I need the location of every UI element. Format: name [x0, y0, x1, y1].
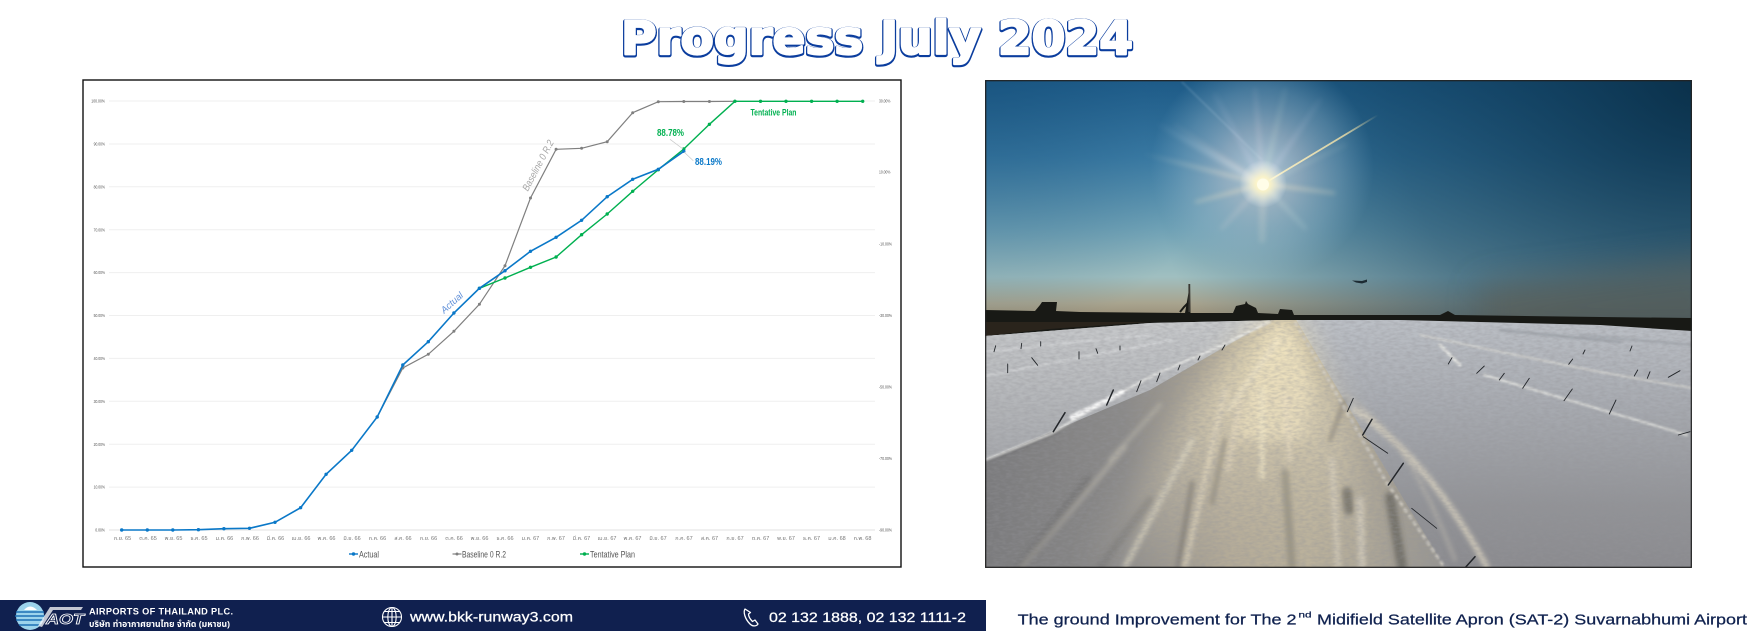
x axis month labels: ม.ค. 66	[216, 536, 233, 542]
x axis month labels: เม.ย. 67	[598, 536, 616, 542]
left axis labels: 20.00%	[94, 442, 105, 447]
x axis month labels: ธ.ค. 67	[803, 536, 820, 542]
right seam folds	[1295, 322, 1445, 568]
left axis labels: 60.00%	[94, 270, 105, 275]
x axis month labels: พ.ย. 66	[471, 536, 488, 542]
right axis labels: -70.00%	[879, 456, 892, 461]
x axis month labels: มิ.ย. 66	[343, 536, 361, 542]
value label 88.19%: 88.19%	[695, 157, 722, 168]
caption: The ground Improvement for The 2	[1018, 612, 1297, 628]
x axis month labels: ก.ค. 66	[369, 536, 386, 542]
caption: Midifield Satellite Apron (SAT-2) Suvarnabhumi Airport	[1317, 612, 1748, 628]
legend: Baseline 0 R.2	[462, 550, 506, 560]
caption	[1018, 610, 1748, 628]
x axis month labels: พ.ค. 66	[318, 536, 335, 542]
stakes	[994, 342, 1690, 567]
icon: AOT logo: AOT	[45, 611, 86, 628]
x axis month labels: ก.ค. 67	[675, 536, 693, 542]
photo: ground improvement site under the sun	[985, 80, 1692, 568]
series annotation: Actual: Actual	[438, 290, 466, 317]
left axis labels: 100.00%	[91, 99, 105, 104]
fabric wrinkles	[1022, 366, 1492, 568]
x axis month labels: ส.ค. 66	[394, 536, 412, 542]
title: Progress July 2024	[621, 11, 1133, 65]
right axis labels: 10.00%	[879, 170, 890, 175]
value label 88.78%: 88.78%	[657, 128, 684, 139]
footer bar	[0, 600, 986, 631]
right axis labels	[879, 98, 892, 532]
left axis labels: 40.00%	[94, 356, 105, 361]
x axis month labels: ต.ค. 66	[445, 536, 463, 542]
ground cover fabric	[985, 315, 1692, 568]
x axis month labels: เม.ย. 66	[292, 536, 310, 542]
x axis month labels	[114, 535, 871, 542]
left axis labels: 80.00%	[94, 184, 105, 189]
right axis labels: 30.00%	[879, 98, 890, 104]
right axis labels: -90.00%	[879, 527, 892, 532]
company name: AIRPORTS OF THAILAND PLC.	[89, 606, 233, 616]
left axis labels: 30.00%	[94, 399, 105, 404]
left axis labels: 90.00%	[94, 142, 105, 147]
panel: progress line chart	[82, 79, 902, 568]
caption: nd	[1298, 610, 1312, 620]
x axis month labels: พ.ย. 67	[777, 536, 795, 542]
x axis month labels: ต.ค. 65	[139, 536, 157, 542]
x axis month labels: พ.ย. 65	[165, 536, 182, 542]
x axis month labels: ก.ย. 65	[114, 536, 131, 542]
x axis month labels: ม.ค. 68	[828, 536, 846, 542]
icon: globe	[382, 608, 402, 626]
x axis month labels: มี.ค. 66	[267, 535, 284, 542]
actual line	[122, 151, 684, 530]
legend	[349, 550, 635, 560]
x axis month labels: ธ.ค. 65	[190, 536, 208, 542]
left axis labels: 0.00%	[95, 528, 105, 533]
phone numbers: 02 132 1888, 02 132 1111-2	[769, 609, 966, 625]
company name: บริษัท ท่าอากาศยานไทย จำกัด (มหาชน)	[89, 618, 230, 629]
x axis month labels: ก.ย. 67	[726, 536, 744, 542]
horizon silhouettes	[985, 284, 1692, 336]
x axis month labels: ต.ค. 67	[752, 536, 769, 542]
left axis labels	[91, 99, 105, 533]
company name	[89, 606, 233, 629]
airplane	[1352, 280, 1367, 284]
icon: phone	[744, 609, 758, 626]
leader lines	[670, 139, 693, 161]
x axis month labels: ก.พ. 67	[547, 536, 565, 542]
x axis month labels: ธ.ค. 66	[496, 536, 514, 542]
left axis labels: 50.00%	[94, 313, 105, 318]
series annotation: Baseline: Baseline 0 R.2	[521, 138, 557, 193]
sky	[985, 80, 1692, 318]
x axis month labels: มี.ค. 67	[573, 535, 590, 542]
right axis labels: -50.00%	[879, 385, 892, 390]
title: Progress July 2024	[621, 12, 1133, 66]
legend: Actual	[359, 550, 379, 560]
baseline line	[377, 101, 735, 417]
icon: AOT logo	[15, 602, 86, 630]
x axis month labels: ก.พ. 66	[241, 536, 259, 542]
x axis month labels: มิ.ย. 67	[649, 536, 667, 542]
right axis labels: -30.00%	[879, 313, 892, 318]
tentative plan line	[479, 101, 863, 288]
legend: Tentative Plan	[590, 550, 635, 560]
x axis month labels: พ.ค. 67	[624, 536, 641, 542]
website: www.bkk-runway3.com	[409, 610, 573, 624]
right axis labels: -10.00%	[879, 241, 892, 246]
series annotation: Tentative Plan: Tentative Plan	[750, 108, 797, 118]
x axis month labels: ม.ค. 67	[522, 536, 539, 542]
left foil seam	[985, 322, 1692, 460]
x axis month labels: ก.ย. 66	[420, 536, 437, 542]
x axis month labels: ก.พ. 68	[854, 536, 871, 542]
x axis month labels: ส.ค. 67	[701, 536, 718, 542]
left axis labels: 10.00%	[94, 485, 105, 490]
sun and lens flare	[1154, 81, 1376, 260]
left axis labels: 70.00%	[94, 227, 105, 232]
